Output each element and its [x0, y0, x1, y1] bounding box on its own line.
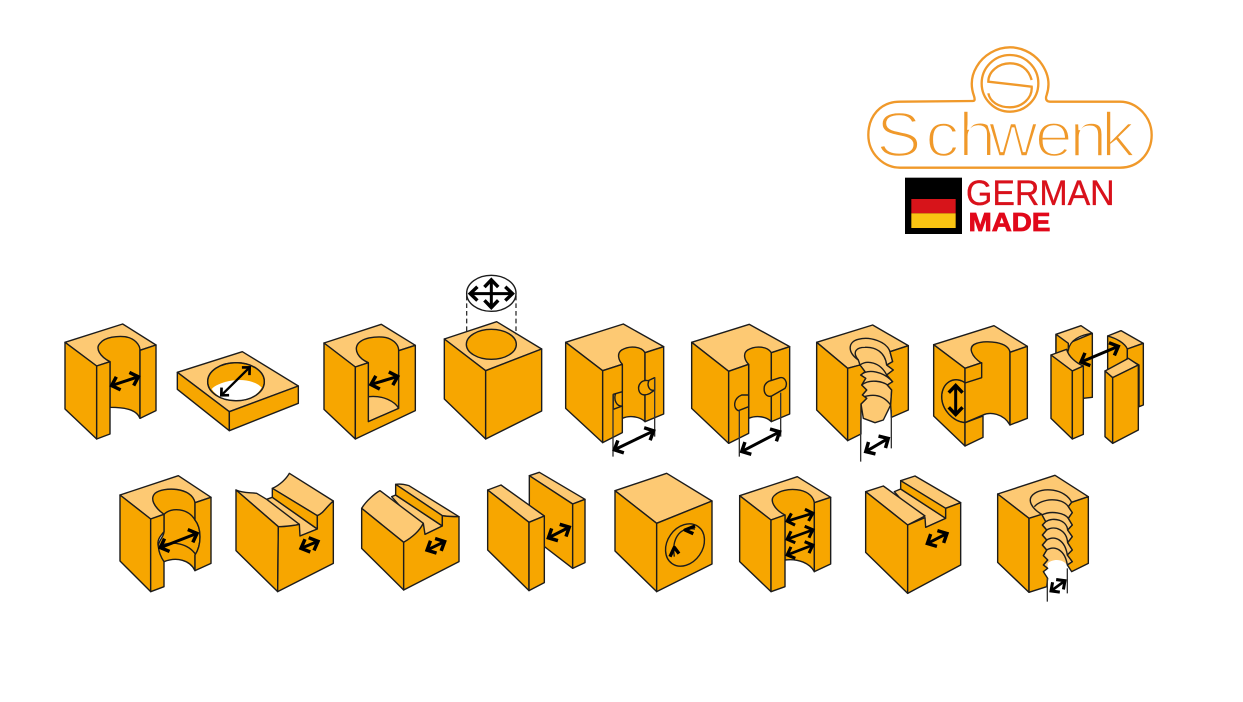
piece 16: cube with straight groove: [866, 476, 961, 593]
piece 2: plate with round hole: [177, 352, 298, 431]
piece 13: two parallel plates: [488, 472, 585, 591]
logo emblem: circled S: [982, 55, 1038, 112]
piece 17: through threaded hole: [998, 475, 1088, 602]
row 2, pieces 10 to 12: [120, 473, 459, 592]
piece 8: slot with side pocket and vertical arrow: [934, 326, 1027, 446]
piece 9: four separated posts with round opening: [1051, 326, 1143, 443]
text: MADE: MADE: [969, 209, 1050, 237]
row 1, pieces 1 to 4: [65, 275, 542, 439]
row 2, pieces 13 to 15: [488, 472, 831, 592]
piece 11: concave top with groove: [236, 473, 333, 592]
piece 5: T-slot with short undercuts: [566, 324, 664, 457]
piece 1: through slot with width arrow: [65, 324, 156, 439]
piece 3: blind slot with floor: [324, 324, 415, 439]
piece 15: slot with three width arrows: [740, 477, 831, 592]
icon: German flag: [905, 178, 962, 234]
row 1, pieces 5 to 7: [566, 324, 908, 462]
piece 12: convex top with groove: [362, 484, 459, 590]
wordmark: Schwenk: Schwenk: [876, 99, 1136, 170]
logo: Schwenk with German Made badge: [868, 47, 1152, 237]
piece 7: threaded hole: [817, 325, 908, 462]
piece 4: cube with round pocket and free-shape ellipse: [444, 275, 542, 439]
piece 14: cube with circular arc arrow: [615, 473, 712, 592]
piece 10: slot with circular inner groove: [120, 476, 211, 592]
row 2, pieces 16 and 17: [866, 475, 1088, 602]
text: GERMAN: GERMAN: [966, 174, 1115, 213]
piece 6: T-slot with long undercuts: [692, 324, 790, 457]
logo outline: [868, 47, 1152, 168]
row 1, pieces 8 and 9: [934, 326, 1143, 446]
